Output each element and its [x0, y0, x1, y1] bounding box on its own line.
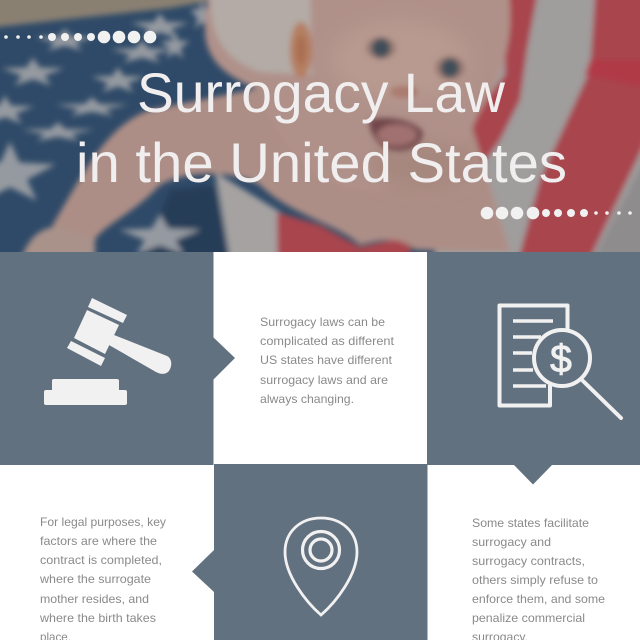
title: Surrogacy Law [137, 61, 506, 124]
hero photo: baby on American flag [0, 0, 640, 252]
arrow: points down from document panel [514, 465, 552, 484]
panel: state policies text [428, 465, 640, 640]
panel: intro text: US states have different [260, 353, 393, 367]
panel: intro text: always changing. [260, 392, 354, 406]
panel: document search [427, 252, 640, 465]
panel: intro text: complicated as different [260, 334, 395, 348]
icon: document with magnifier and dollar sign [500, 306, 621, 418]
panel: intro text: Surrogacy laws can be [260, 315, 385, 329]
panel: legal factors text: factors are where the [40, 534, 157, 548]
panel: legal factors text: where the surrogate [39, 572, 151, 586]
panel: legal factors text [0, 465, 214, 640]
title [76, 61, 567, 194]
baby head [201, 0, 514, 128]
white and red cloth under baby [211, 170, 284, 252]
panel: location pin [192, 464, 428, 640]
icon: document with magnifier and dollar sign: $ [550, 338, 572, 381]
title: in the United States [76, 131, 567, 194]
panel: state policies text: others simply refuse to [472, 573, 598, 587]
icon: gavel [44, 298, 171, 405]
decorative dot row: bottom right [481, 207, 632, 219]
panel: legal factors text: mother resides, and [40, 592, 149, 606]
panel: legal factors text: contract is completed, [40, 553, 162, 567]
panel: state policies text: surrogacy contracts, [472, 554, 585, 568]
panel: gavel [0, 252, 235, 465]
panel: legal factors text: where the birth takes [39, 611, 156, 625]
panel: state policies text: Some states facilitate [472, 516, 589, 530]
flag right side [432, 0, 640, 252]
panel: legal factors text: For legal purposes, key [40, 515, 166, 529]
panel: intro text: surrogacy laws and are [260, 373, 388, 387]
decorative dot row: top left [4, 31, 156, 43]
panel: state policies text: surrogacy and [472, 535, 551, 549]
arrow: points left to legal factors text [192, 550, 214, 592]
icon: location pin [285, 518, 357, 615]
arrow: points right to intro text [213, 337, 235, 380]
baby arm and body [52, 80, 510, 252]
panel: state policies text: penalize commercial [472, 611, 585, 625]
panel: intro text [213, 252, 427, 464]
panel: state policies text: enforce them, and some [472, 592, 605, 606]
